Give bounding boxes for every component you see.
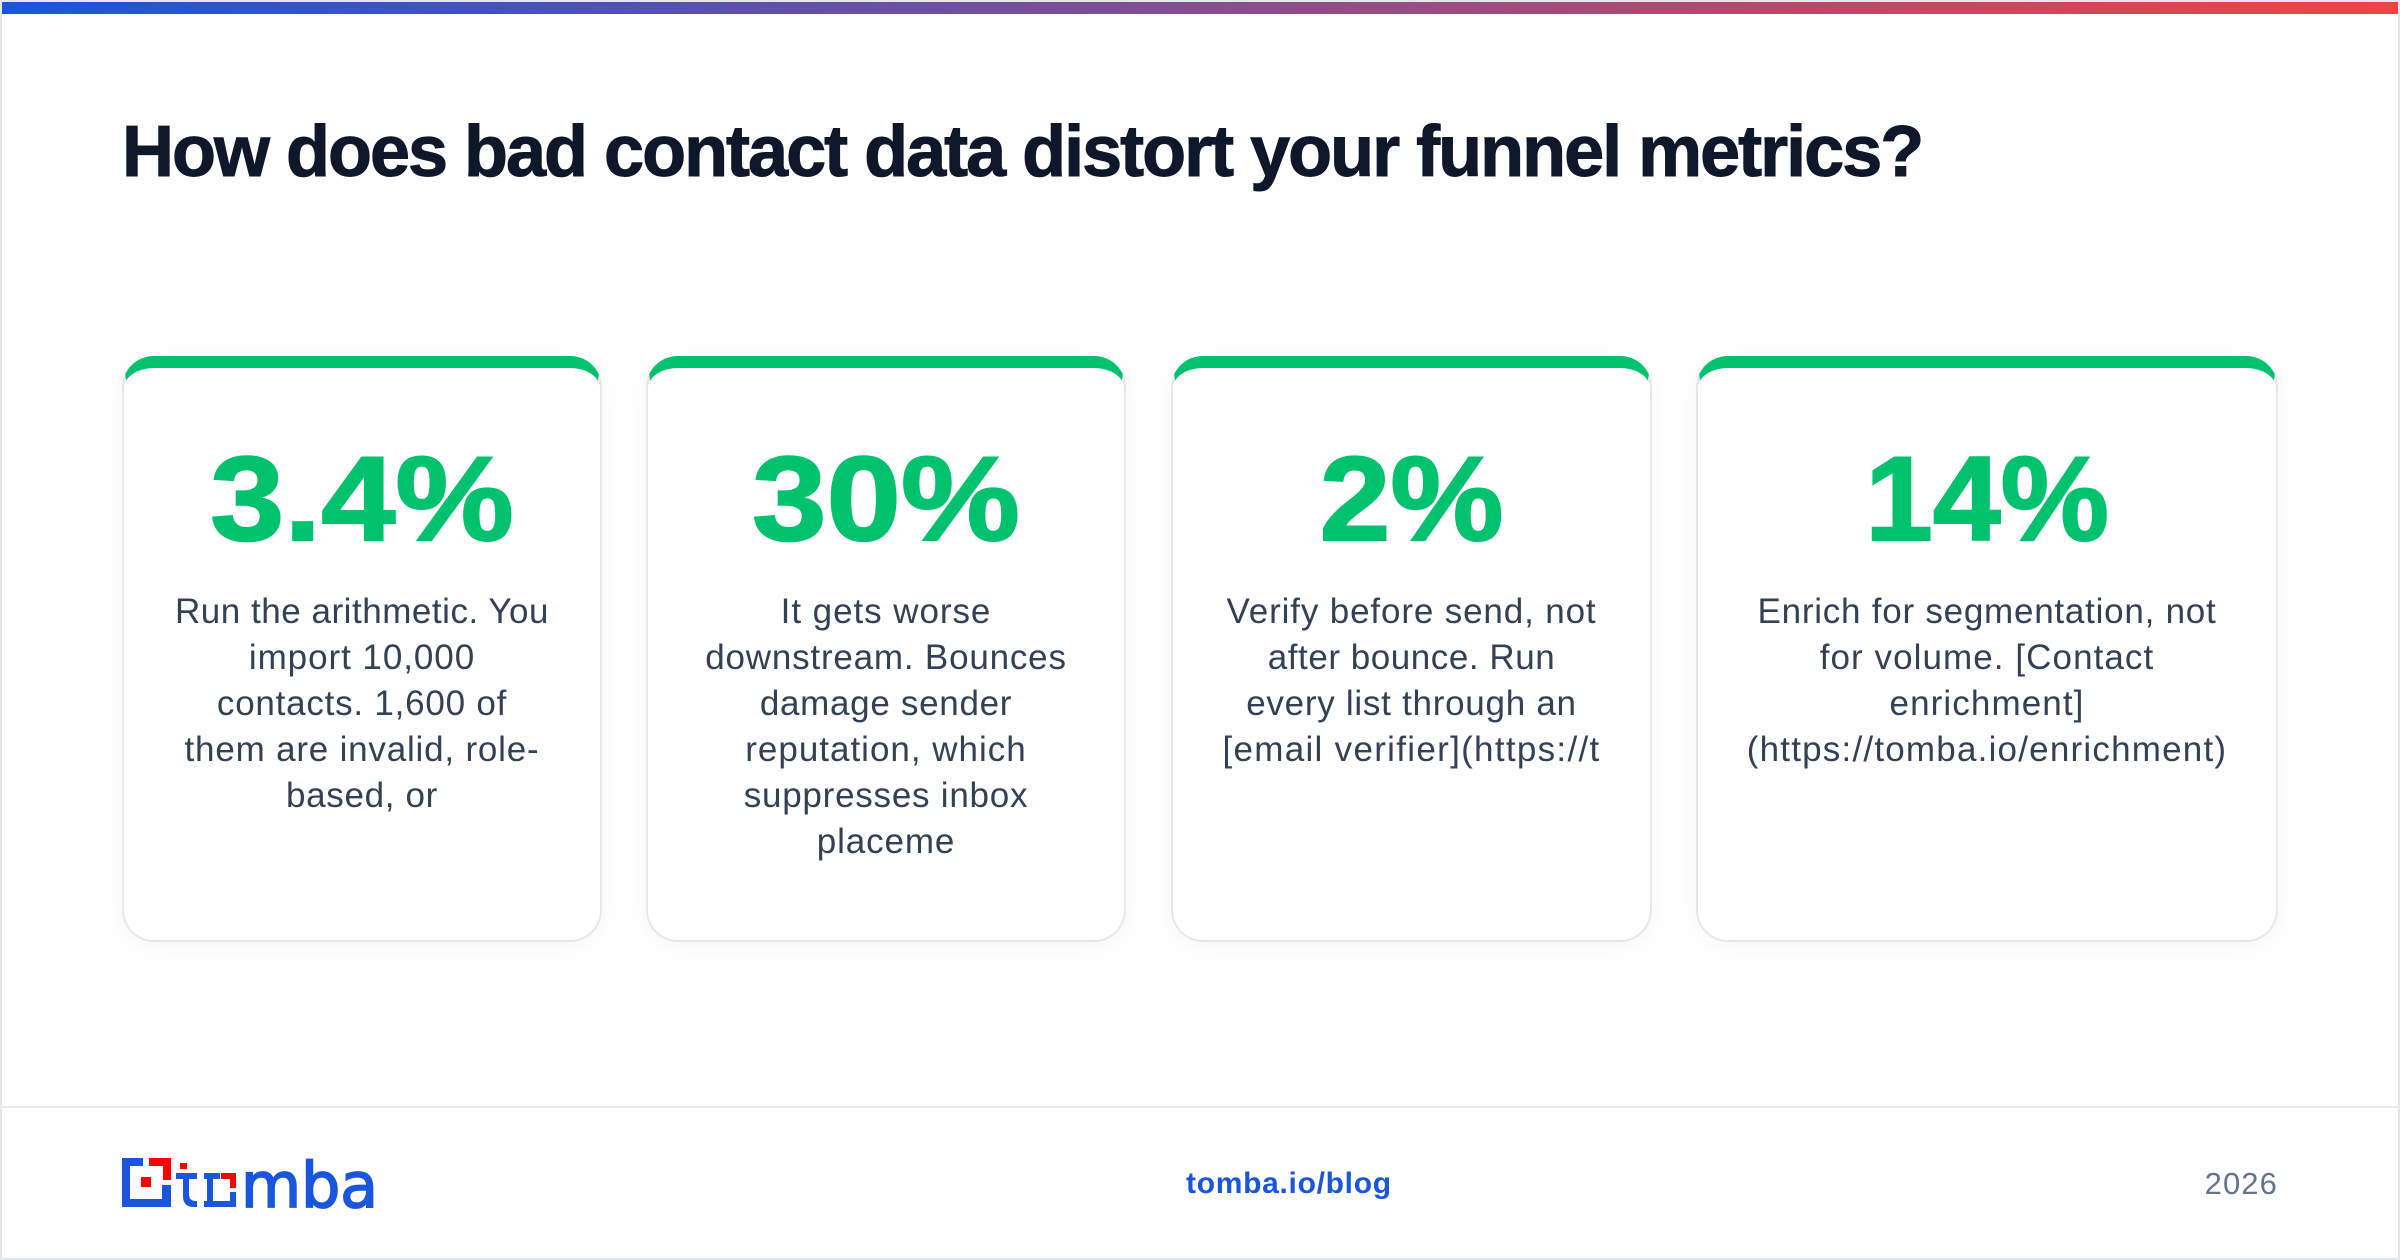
- stat: 2%: 2%: [1320, 432, 1503, 566]
- text: card 3 body: [email verifier](https://t: [1222, 730, 1601, 769]
- text: card 3 body: Verify before send, not: [1226, 592, 1596, 631]
- stat: 14%: 14%: [1865, 432, 2109, 566]
- text: card 1 body: contacts. 1,600 of: [217, 684, 507, 723]
- text: card 1 body: based, or: [286, 776, 438, 815]
- logo letters: mba: mba: [241, 1149, 378, 1220]
- text: card 1 body: them are invalid, role-: [185, 730, 539, 769]
- text: card 3 body: [1222, 592, 1601, 769]
- footer link: tomba.io/blog: [1186, 1167, 1392, 1200]
- text: card 1 body: import 10,000: [249, 638, 475, 677]
- text: card 2 body: placeme: [817, 822, 955, 861]
- text: card 1 body: [175, 592, 549, 815]
- text: card 1 body: Run the arithmetic. You: [175, 592, 549, 631]
- text: card 4 body: [1747, 592, 2227, 769]
- title: How does bad contact data distort your funnel metrics?: [122, 112, 1922, 192]
- text: card 2 body: [705, 592, 1067, 861]
- stat: 30%: 30%: [752, 432, 1020, 566]
- text: card 2 body: suppresses inbox: [744, 776, 1028, 815]
- text: card 4 body: for volume. [Contact: [1820, 638, 2154, 677]
- text: card 3 body: after bounce. Run: [1268, 638, 1555, 677]
- text: card 4 body: enrichment]: [1890, 684, 2084, 723]
- panel: card 1: [122, 356, 602, 942]
- text: card 2 body: downstream. Bounces: [705, 638, 1067, 677]
- logo: tomba: [122, 1149, 378, 1220]
- icon: logo mark: [122, 1158, 171, 1207]
- text: card 2 body: It gets worse: [781, 592, 991, 631]
- stat: 3.4%: 3.4%: [210, 432, 514, 566]
- panel: card 2: [646, 356, 1126, 942]
- text: card 4 body: (https://tomba.io/enrichment): [1747, 730, 2227, 769]
- text: card 2 body: reputation, which: [745, 730, 1027, 769]
- text: card 4 body: Enrich for segmentation, not: [1757, 592, 2217, 631]
- panel: card 3: [1171, 356, 1652, 942]
- text: card 3 body: every list through an: [1246, 684, 1577, 723]
- footer year: 2026: [2205, 1166, 2278, 1201]
- top gradient bar: [2, 2, 2398, 14]
- text: card 2 body: damage sender: [760, 684, 1012, 723]
- footer divider: [2, 1106, 2398, 1108]
- logo letters: t and o: [176, 1163, 236, 1207]
- panel: card 4: [1696, 356, 2278, 942]
